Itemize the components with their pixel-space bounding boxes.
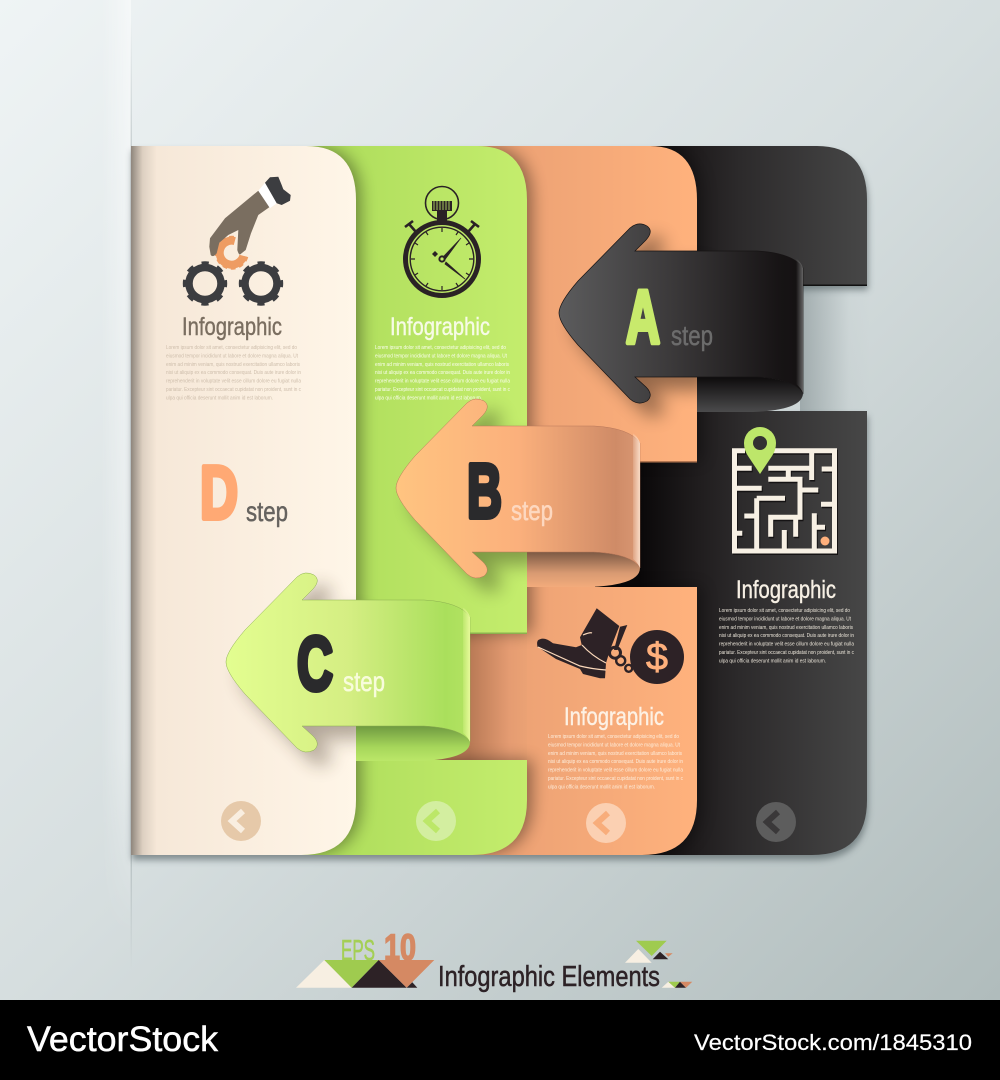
footer bar: [0, 1000, 1000, 1080]
icon: boot with money ball: [537, 608, 684, 684]
cuff: [258, 183, 277, 208]
text block: green panel: enim ad minim veniam, quis nostrud exercitation ullamco laboris: [375, 362, 509, 368]
step label D: [200, 450, 288, 534]
arrow: step B: [396, 399, 640, 591]
word step: step: [343, 666, 385, 697]
orange gear: [217, 238, 246, 268]
arrow: step C: [226, 573, 470, 765]
text block: orange panel: pariatur. Excepteur sint occaecat cupidatat non proident, sunt in c: [548, 776, 683, 782]
button: black: [756, 802, 796, 842]
chain rings: [610, 647, 632, 672]
text block: black panel: enim ad minim veniam, quis nostrud exercitation ullamco laboris: [719, 625, 853, 631]
text block: orange panel: ulpa qui officia deserunt mollit anim id est laborum.: [548, 784, 655, 790]
sleeve: [265, 177, 291, 205]
word step: step: [671, 320, 713, 351]
panel: orange B: [436, 146, 697, 855]
text block: cream panel: Lorem ipsum dolor sit amet, consectetur adipisicing elit, sed do: [166, 345, 297, 351]
vertical fold line: [130, 20, 132, 970]
text block: black panel: eiusmod tempor incididunt ut labore et dolore magna aliqua. Ut: [719, 616, 851, 622]
text block: orange panel: Lorem ipsum dolor sit amet, consectetur adipisicing elit, sed do: [548, 734, 679, 740]
icon: stopwatch: [405, 186, 479, 296]
step label D: D: [200, 450, 238, 534]
heading: green panel: Infographic: [390, 313, 490, 341]
logo: triangles, EPS 10 and title: [296, 927, 692, 993]
text block: cream panel: pariatur. Excepteur sint occaecat cupidatat non proident, sunt in c: [166, 387, 301, 393]
spur: [614, 625, 627, 650]
button: green: [416, 801, 456, 841]
panel drop shadow: [132, 151, 868, 860]
text block: green panel: eiusmod tempor incididunt ut labore et dolore magna aliqua. Ut: [375, 353, 507, 359]
arrow: step A: [559, 224, 803, 416]
letter B: B: [467, 448, 502, 534]
text block: black panel: nisi ut aliquip ex ea commodo consequat. Duis aute irure dolor in: [719, 633, 854, 639]
icon: hand and gears: [185, 177, 291, 304]
text block: black panel: pariatur. Excepteur sint occaecat cupidatat non proident, sunt in c: [719, 650, 854, 656]
panel: green C: [300, 146, 532, 855]
maze wall shadow: [736, 452, 836, 552]
word step: step: [511, 495, 553, 526]
text block: orange panel: [548, 734, 684, 790]
text block: cream panel: eiusmod tempor incididunt ut labore et dolore magna aliqua. Ut: [166, 353, 298, 359]
text block: black panel: reprehenderit in voluptate velit esse cillum dolore eu fugiat nulla: [719, 642, 855, 648]
text block: green panel: nisi ut aliquip ex ea commodo consequat. Duis aute irure dolor in: [375, 370, 510, 376]
text block: orange panel: nisi ut aliquip ex ea commodo consequat. Duis aute irure dolor in: [548, 759, 683, 765]
text block: cream panel: ulpa qui officia deserunt mollit anim id est laborum.: [166, 395, 273, 401]
upper small triangles: [625, 941, 673, 963]
letter C: C: [297, 622, 333, 707]
button: cream: [221, 801, 261, 841]
money ball: [630, 630, 684, 684]
text block: green panel: pariatur. Excepteur sint occaecat cupidatat non proident, sunt in c: [375, 387, 510, 393]
hand: [209, 191, 270, 256]
maze walls: [734, 451, 834, 551]
footer url: VectorStock.com/1845310: [694, 1030, 972, 1055]
title: Infographic Elements: [438, 961, 660, 993]
version 10: 10: [384, 927, 416, 968]
text block: green panel: [375, 345, 511, 401]
maze goal dot: [820, 536, 830, 546]
text block: black panel: Lorem ipsum dolor sit amet, consectetur adipisicing elit, sed do: [719, 608, 850, 614]
panel: cream D: [131, 146, 361, 855]
location pin: [744, 427, 776, 474]
text block: cream panel: [166, 345, 302, 401]
heading: black panel: Infographic: [736, 576, 836, 604]
dollar sign: $: [646, 636, 668, 678]
panel: black A: [580, 146, 867, 855]
text block: green panel: reprehenderit in voluptate velit esse cillum dolore eu fugiat nulla: [375, 379, 511, 385]
heading: orange panel: Infographic: [564, 703, 664, 731]
notch shading: [800, 286, 870, 411]
gear left: [185, 264, 225, 304]
letter A: A: [626, 274, 660, 358]
lower small triangles: [662, 982, 692, 988]
EPS label: EPS: [341, 935, 375, 967]
footer brand: VectorStock: [27, 1020, 219, 1059]
boot highlights: [538, 633, 606, 670]
text block: orange panel: enim ad minim veniam, quis nostrud exercitation ullamco laboris: [548, 751, 682, 757]
boot: [537, 608, 619, 678]
text block: black panel: [719, 608, 855, 664]
text block: cream panel: enim ad minim veniam, quis nostrud exercitation ullamco laboris: [166, 362, 300, 368]
text block: orange panel: reprehenderit in voluptate velit esse cillum dolore eu fugiat nulla: [548, 768, 684, 774]
text block: orange panel: eiusmod tempor incididunt ut labore et dolore magna aliqua. Ut: [548, 742, 680, 748]
main triangles: [296, 960, 434, 988]
gear right: [241, 264, 281, 304]
left paper strip highlight: [118, 0, 131, 821]
icon: maze with location pin: [734, 427, 836, 552]
text block: green panel: ulpa qui officia deserunt mollit anim id est laborum.: [375, 395, 482, 401]
text block: black panel: ulpa qui officia deserunt mollit anim id est laborum.: [719, 658, 826, 664]
text block: cream panel: reprehenderit in voluptate velit esse cillum dolore eu fugiat nulla: [166, 379, 302, 385]
heading: cream panel: Infographic: [182, 313, 282, 341]
text block: cream panel: nisi ut aliquip ex ea commodo consequat. Duis aute irure dolor in: [166, 370, 301, 376]
step label D: step: [246, 496, 288, 527]
button: orange: [586, 803, 626, 843]
text block: green panel: Lorem ipsum dolor sit amet, consectetur adipisicing elit, sed do: [375, 345, 506, 351]
